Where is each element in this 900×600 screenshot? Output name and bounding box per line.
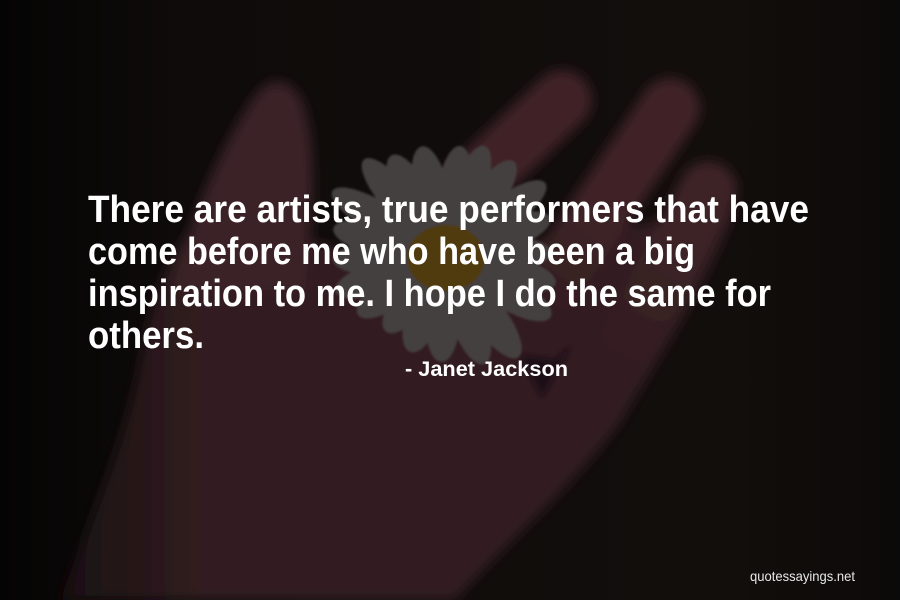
quote text (88, 189, 809, 357)
ring finger (620, 190, 708, 360)
index finger (430, 100, 562, 225)
thumb (172, 81, 313, 290)
palm crease (520, 345, 572, 398)
daisy petals (324, 141, 559, 370)
quote text: come before me who have been a big (88, 231, 695, 273)
author attribution: - Janet Jackson (405, 358, 568, 381)
quote text: inspiration to me. I hope I do the same for (88, 273, 771, 315)
photo: hand (60, 81, 735, 600)
middle finger (540, 108, 670, 300)
daisy centre (407, 225, 485, 291)
palm (60, 210, 735, 600)
photo: daisy (324, 141, 559, 370)
quote text: There are artists, true performers that have (88, 189, 809, 231)
watermark: quotessayings.net (750, 568, 855, 584)
quote text: others. (88, 315, 204, 357)
